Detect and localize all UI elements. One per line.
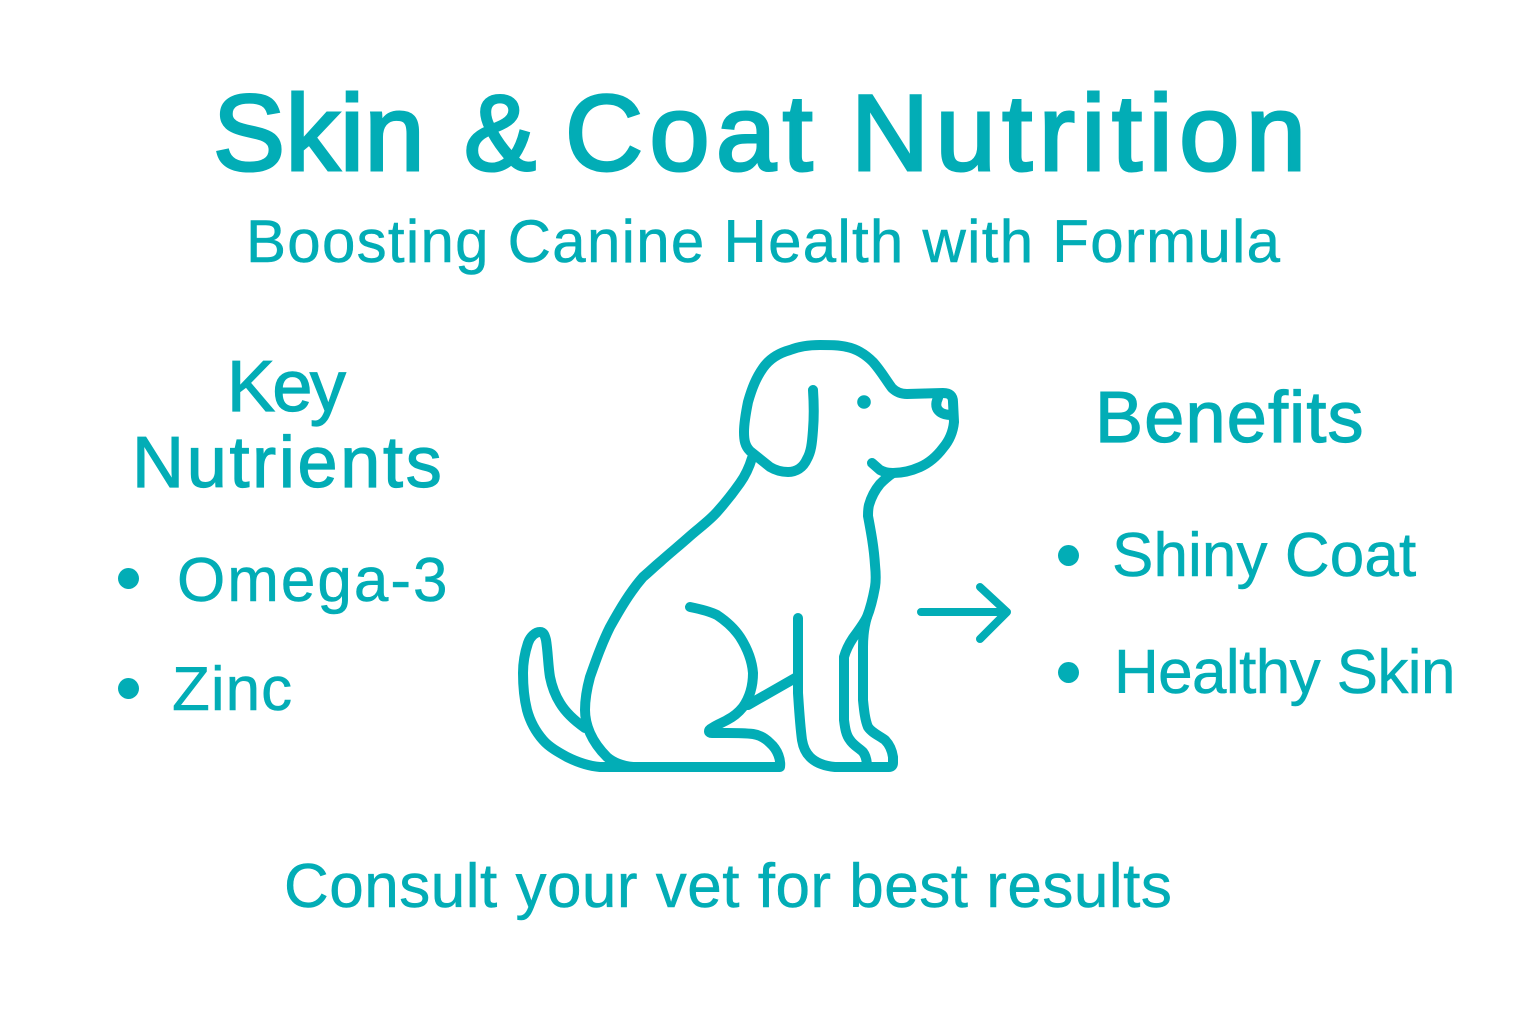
subtitle: Boosting Canine Health with Formula — [246, 208, 1281, 275]
bullet: shiny coat: Shiny Coat — [1112, 521, 1416, 590]
title: Coat — [565, 72, 819, 193]
tail — [523, 632, 633, 767]
icon: sitting dog — [518, 340, 959, 772]
outer front leg and paw — [798, 617, 893, 767]
leg joint — [748, 677, 797, 705]
panel: benefits — [1058, 378, 1455, 707]
back and rump — [585, 458, 780, 767]
bullet: zinc — [118, 655, 293, 724]
head and ear outline — [744, 345, 954, 473]
neck, chest and inner front leg — [844, 473, 893, 767]
title — [213, 72, 1313, 193]
bullet: zinc: Zinc — [172, 655, 293, 724]
heading: key nutrients — [132, 347, 444, 503]
bullet: healthy skin: Healthy Skin — [1114, 638, 1455, 707]
footer note: Consult your vet for best results — [284, 852, 1172, 921]
panel: key nutrients — [118, 347, 449, 724]
heading: benefits: Benefits — [1095, 378, 1365, 458]
bullet: omega-3: Omega-3 — [177, 546, 449, 615]
eye — [857, 395, 871, 409]
heading: key nutrients: Key — [227, 347, 343, 427]
heading: key nutrients: Nutrients — [132, 423, 444, 503]
title: Skin — [213, 72, 425, 193]
nose — [936, 398, 953, 415]
title: Nutrition — [851, 72, 1313, 193]
arrow — [917, 583, 1011, 643]
title: & — [464, 72, 536, 193]
